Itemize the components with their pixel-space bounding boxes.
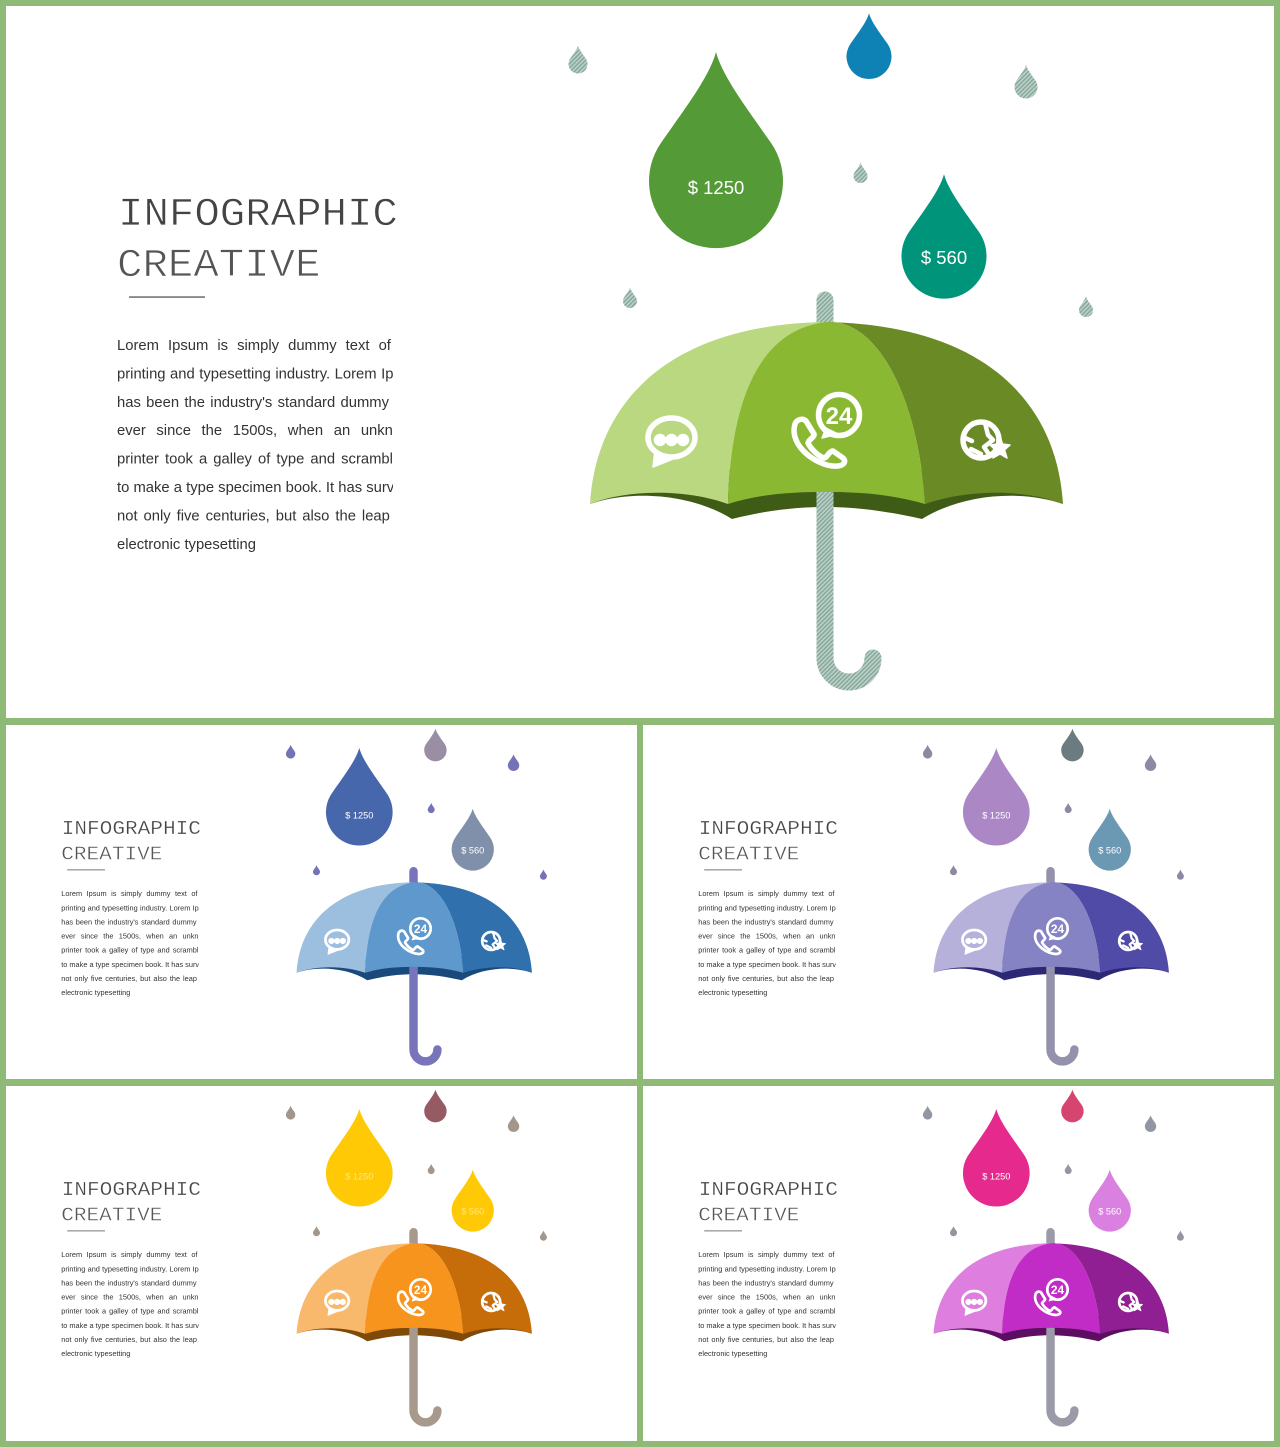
- panel: large green umbrella slide: [6, 6, 1274, 718]
- small rain drops: [923, 1106, 1184, 1241]
- body text: to make a type specimen book. It has surv: [117, 480, 395, 496]
- body text: [61, 889, 199, 997]
- icon: chat bubble: [962, 1291, 986, 1315]
- body text: not only five centuries, but also the leap: [61, 1335, 197, 1344]
- title: [699, 1182, 837, 1220]
- body text: electronic typesetting: [61, 988, 130, 997]
- drop: $ 560: $ 560: [921, 247, 967, 268]
- body text: to make a type specimen book. It has surv: [61, 1321, 199, 1330]
- icon: chat bubble: [648, 418, 695, 467]
- icon: globe star: [482, 1293, 506, 1311]
- body text: ever since the 1500s, when an unkn: [698, 932, 835, 941]
- top drop: [1061, 1090, 1084, 1122]
- body text: [698, 889, 836, 997]
- panel: blue umbrella slide: [6, 725, 637, 1079]
- drop: $ 560: $ 560: [1098, 1206, 1121, 1216]
- body text: to make a type specimen book. It has surv: [61, 960, 199, 969]
- title underline: [704, 868, 742, 871]
- body text: Lorem Ipsum is simply dummy text of: [61, 889, 198, 898]
- drop: $ 560: [902, 174, 986, 299]
- body text: has been the industry's standard dummy: [61, 917, 197, 926]
- body text: ever since the 1500s, when an unkn: [61, 932, 198, 941]
- body text: Lorem Ipsum is simply dummy text of: [61, 1250, 198, 1259]
- panel: purple umbrella slide: [643, 725, 1274, 1079]
- umbrella: [590, 300, 1063, 682]
- icon: phone 24: 24: [826, 403, 853, 430]
- icon: globe star: [482, 932, 506, 950]
- icon: chat bubble: [962, 930, 986, 954]
- body text: [117, 338, 395, 553]
- top drop: [424, 1090, 447, 1122]
- body text: printing and typesetting industry. Lorem Ip: [698, 1264, 836, 1273]
- title underline: [704, 1229, 742, 1232]
- body text: Lorem Ipsum is simply dummy text of: [117, 338, 392, 354]
- icon: globe star: [1119, 1293, 1143, 1311]
- body text: printer took a galley of type and scrambl: [698, 1307, 836, 1316]
- drop: $ 1250: $ 1250: [345, 811, 373, 821]
- icon: globe star: [963, 422, 1010, 458]
- body text: ever since the 1500s, when an unkn: [61, 1293, 198, 1302]
- small rain drops: [286, 1106, 547, 1241]
- top blue drop: [846, 13, 892, 79]
- title: INFOGRAPHIC: [62, 819, 201, 841]
- body text: to make a type specimen book. It has surv: [698, 1321, 836, 1330]
- drop: $ 560: [452, 809, 494, 871]
- panel: magenta umbrella slide: [643, 1086, 1274, 1441]
- title: [62, 821, 200, 860]
- body text: Lorem Ipsum is simply dummy text of: [698, 889, 835, 898]
- small rain drops: [286, 745, 547, 880]
- drop: $ 1250: [963, 748, 1030, 845]
- panel: orange umbrella slide: [6, 1086, 637, 1441]
- icon: chat bubble: [325, 930, 349, 954]
- drop: $ 560: $ 560: [461, 1206, 484, 1216]
- drop: $ 1250: [963, 1109, 1030, 1206]
- icon: phone 24: [794, 394, 860, 466]
- title underline: [67, 868, 105, 871]
- icon: phone 24: 24: [1051, 1283, 1064, 1297]
- title: CREATIVE: [61, 844, 162, 866]
- drop: $ 1250: [326, 1109, 393, 1206]
- body text: printer took a galley of type and scrambl: [61, 1307, 199, 1316]
- icon: chat bubble: [325, 1291, 349, 1315]
- body text: has been the industry's standard dummy: [698, 1278, 834, 1287]
- body text: printer took a galley of type and scrambl: [61, 946, 199, 955]
- title: INFOGRAPHIC: [118, 193, 398, 238]
- title: [699, 821, 837, 860]
- icon: phone 24: [1035, 1279, 1068, 1315]
- umbrella: [934, 871, 1169, 1061]
- title: CREATIVE: [117, 244, 321, 289]
- title: CREATIVE: [698, 1205, 799, 1227]
- body text: Lorem Ipsum is simply dummy text of: [698, 1250, 835, 1259]
- body text: printing and typesetting industry. Lorem Ip: [61, 903, 199, 912]
- body text: electronic typesetting: [698, 1349, 767, 1358]
- umbrella: [934, 1232, 1169, 1422]
- drop: $ 1250: $ 1250: [982, 1172, 1010, 1182]
- top drop: [1061, 729, 1084, 761]
- icon: phone 24: [398, 1279, 431, 1315]
- small rain drops: [923, 745, 1184, 880]
- body text: printer took a galley of type and scrambl: [117, 452, 393, 468]
- title: INFOGRAPHIC: [62, 1180, 201, 1202]
- drop: $ 560: [1089, 1170, 1131, 1232]
- body text: not only five centuries, but also the leap: [698, 974, 834, 983]
- title: INFOGRAPHIC: [699, 1180, 838, 1202]
- body text: printing and typesetting industry. Lorem Ip: [698, 903, 836, 912]
- icon: phone 24: [398, 918, 431, 954]
- body text: [61, 1250, 199, 1358]
- title underline: [67, 1229, 105, 1232]
- body text: has been the industry's standard dummy: [698, 917, 834, 926]
- body text: electronic typesetting: [61, 1349, 130, 1358]
- drop: $ 1250: $ 1250: [688, 177, 744, 198]
- body text: not only five centuries, but also the leap: [117, 508, 390, 524]
- icon: phone 24: 24: [414, 922, 427, 936]
- drop: $ 1250: [326, 748, 393, 845]
- drop: $ 1250: $ 1250: [345, 1172, 373, 1182]
- body text: [698, 1250, 836, 1358]
- icon: globe star: [1119, 932, 1143, 950]
- body text: to make a type specimen book. It has surv: [698, 960, 836, 969]
- top drop: [424, 729, 447, 761]
- body text: not only five centuries, but also the leap: [61, 974, 197, 983]
- body text: electronic typesetting: [698, 988, 767, 997]
- title: [120, 198, 396, 276]
- icon: phone 24: [1035, 918, 1068, 954]
- body text: printer took a galley of type and scrambl: [698, 946, 836, 955]
- drop: $ 560: [452, 1170, 494, 1232]
- small rain drops: [568, 46, 1093, 317]
- drop: $ 560: $ 560: [461, 845, 484, 855]
- icon: phone 24: 24: [1051, 922, 1064, 936]
- title underline: [129, 296, 205, 298]
- drop: $ 1250: $ 1250: [982, 811, 1010, 821]
- body text: printing and typesetting industry. Lorem Ip: [61, 1264, 199, 1273]
- icon: phone 24: 24: [414, 1283, 427, 1297]
- title: [62, 1182, 200, 1220]
- body text: not only five centuries, but also the leap: [698, 1335, 834, 1344]
- drop: $ 560: [1089, 809, 1131, 871]
- umbrella: [297, 871, 532, 1061]
- body text: ever since the 1500s, when an unkn: [117, 423, 393, 439]
- body text: ever since the 1500s, when an unkn: [698, 1293, 835, 1302]
- drop: $ 1250: [649, 52, 783, 248]
- body text: electronic typesetting: [117, 537, 256, 553]
- title: INFOGRAPHIC: [699, 819, 838, 841]
- title: CREATIVE: [698, 844, 799, 866]
- umbrella: [297, 1232, 532, 1422]
- drop: $ 560: $ 560: [1098, 845, 1121, 855]
- body text: printing and typesetting industry. Lorem Ip: [117, 366, 393, 382]
- body text: has been the industry's standard dummy: [117, 395, 390, 411]
- body text: has been the industry's standard dummy: [61, 1278, 197, 1287]
- title: CREATIVE: [61, 1205, 162, 1227]
